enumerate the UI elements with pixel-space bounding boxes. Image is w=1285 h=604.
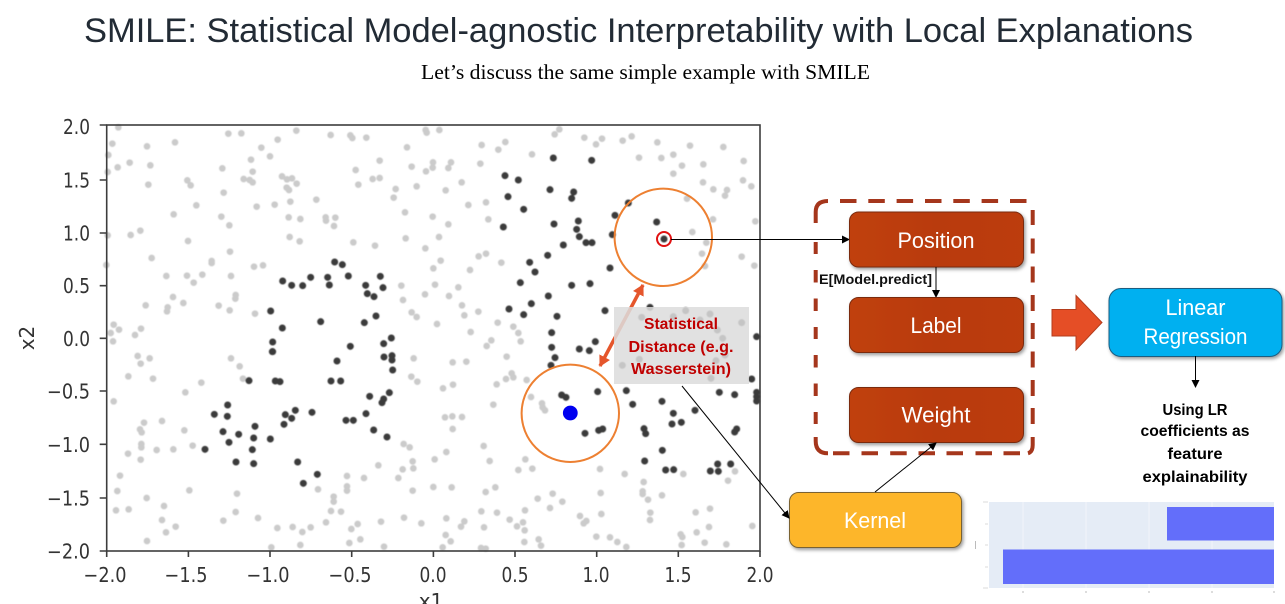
dashed group [816,201,1033,453]
subtitle: Let’s discuss the same simple example with SMILE [421,60,870,84]
arrow: kernel to weight [875,443,936,492]
title: SMILE: Statistical Model-agnostic Interpretability with Local Explanations [84,12,1193,50]
box: position [850,212,1024,267]
y axis labels: 1.5 [63,168,90,192]
y axis labels: 0.0 [63,327,90,351]
circle: selected point [657,232,671,246]
y axis labels: 2.0 [63,115,90,139]
x axis labels: −1.0 [246,563,290,587]
x axis labels: 0.0 [420,563,446,587]
feature importance bar chart [976,502,1274,593]
y axis labels [15,115,90,564]
blue instance point [563,406,578,420]
circle: original neighborhood [522,365,619,462]
box: linear regression: Linear [1166,295,1226,320]
x axis labels [84,563,774,604]
label: expected prediction: E[Model.predict] [819,271,932,287]
x axis labels: −2.0 [84,563,126,587]
x axis labels: 1.5 [664,563,692,587]
dark scatter points [205,158,757,483]
box: label: Label [910,313,962,338]
box: label [850,298,1024,352]
plot frame and ticks [100,125,760,557]
box: kernel: Kernel [844,508,906,533]
box: linear regression: Regression [1144,324,1248,349]
box: kernel [790,492,962,548]
bar: first feature [1167,507,1274,540]
scatter chart [15,115,774,604]
text: using LR coefficients: Using LR [1162,402,1228,419]
y axis labels: −1.0 [47,433,90,457]
x axis labels: −0.5 [328,563,372,587]
box: position: Position [898,228,974,253]
box: weight [850,388,1024,442]
callout: statistical distance: Wasserstein) [631,361,731,378]
x axis labels: −1.5 [164,563,208,587]
text: using LR coefficients: feature [1168,446,1223,463]
arrow: position to label [935,267,937,297]
x axis labels: 1.0 [582,563,610,587]
y axis labels: −1.5 [47,486,90,510]
y axis labels: −2.0 [47,540,90,564]
callout: statistical distance: Distance (e.g. [628,339,734,356]
circle: perturbed neighborhood [615,189,712,286]
light scatter points [106,127,755,549]
arrow: regression to text [1194,356,1196,387]
text: using LR coefficients: coefficients as [1140,423,1250,440]
y axis labels: 1.0 [63,222,90,246]
box: weight: Weight [902,402,970,428]
block arrow [1052,296,1102,350]
x axis labels: 0.5 [502,563,528,587]
bar: second feature [1003,550,1274,584]
y axis labels: x2 [15,326,39,350]
callout: statistical distance: Statistical [644,316,718,333]
arrow: point to position [671,238,849,240]
callout: statistical distance [614,307,749,384]
box: linear regression [1109,288,1282,356]
y axis labels: 0.5 [63,274,90,298]
arrow: statistical distance [600,285,643,366]
text: using LR coefficients: explainability [1142,469,1248,486]
y axis labels: −0.5 [47,380,90,404]
arrow: distance to kernel [682,386,789,518]
x axis labels: 2.0 [746,563,774,587]
